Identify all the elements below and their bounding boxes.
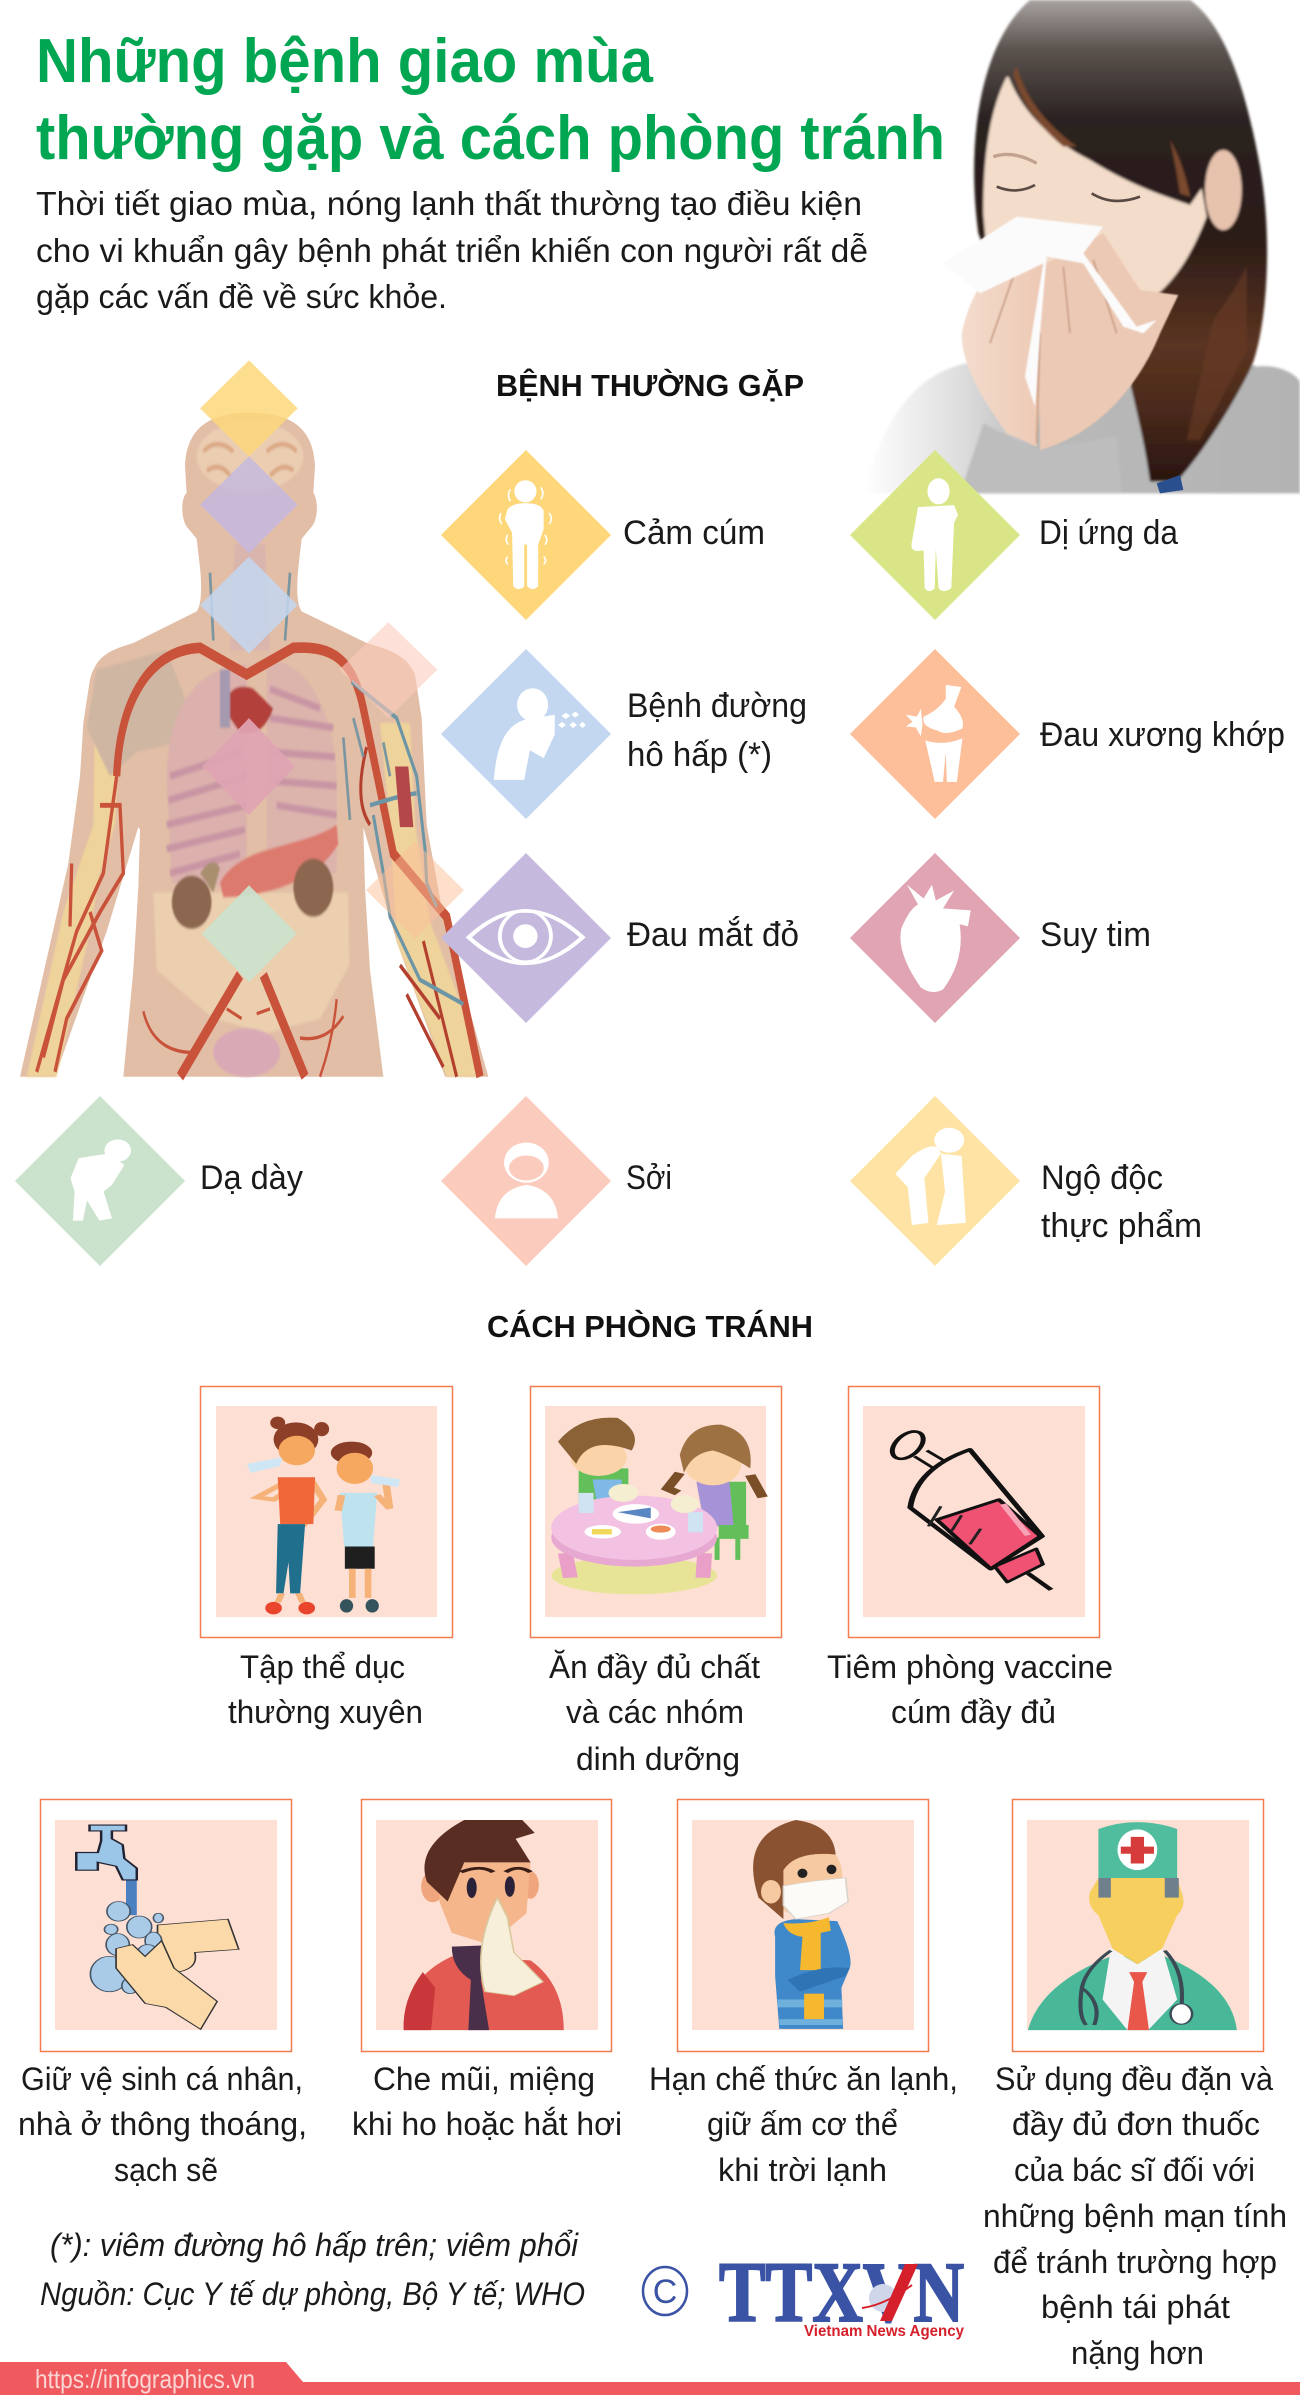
illness: measles: Sởi <box>626 1159 672 1197</box>
title <box>36 27 945 173</box>
tip card: follow doctor's prescription <box>983 1800 1287 2371</box>
illness: flu: Cảm cúm <box>623 514 765 552</box>
heading: common illnesses: BỆNH THƯỜNG GẶP <box>496 367 804 403</box>
footer bar with url: https://infographics.vn <box>35 2364 255 2394</box>
illness: food poisoning: Ngộ độc <box>1041 1159 1163 1197</box>
tip card: hygiene: nhà ở thông thoáng, <box>18 2106 307 2142</box>
illness: food poisoning <box>850 1096 1202 1266</box>
organ marker: purple diamond <box>200 456 298 553</box>
tip card: hygiene: Giữ vệ sinh cá nhân, <box>21 2061 303 2097</box>
tip card: follow doctor's prescription: đầy đủ đơn thuốc <box>1012 2106 1260 2142</box>
organ marker: peach diamond lower <box>366 842 464 939</box>
tip card: follow doctor's prescription: những bệnh mạn tính <box>983 2198 1287 2234</box>
title: thường gặp và cách phòng tránh <box>36 104 945 173</box>
tip card: exercise <box>200 1386 452 1730</box>
tip card: keep warm <box>649 1800 958 2188</box>
photo: woman sneezing into a tissue <box>863 0 1300 493</box>
illness: skin allergy: Dị ứng da <box>1039 514 1178 552</box>
tip card: flu vaccine: Tiêm phòng vaccine <box>827 1649 1113 1685</box>
footnote and source <box>40 2227 585 2312</box>
illness: heart failure <box>850 853 1151 1023</box>
tip card: keep warm: khi trời lạnh <box>718 2152 887 2188</box>
tip card: hygiene: sạch sẽ <box>114 2152 218 2188</box>
illness: joint pain <box>850 649 1285 819</box>
logo: TTXVN: TTXVN <box>719 2244 964 2340</box>
illness: respiratory disease <box>441 649 807 819</box>
organ marker: pink diamond <box>202 718 295 815</box>
organ marker: peach diamond upper <box>339 622 437 718</box>
intro text: gặp các vấn đề về sức khỏe. <box>36 278 447 315</box>
intro text: cho vi khuẩn gây bệnh phát triển khiến con người rất dễ <box>36 232 868 269</box>
tip card: follow doctor's prescription: bệnh tái phát <box>1041 2289 1230 2325</box>
illness: measles <box>441 1096 672 1266</box>
intro text: Thời tiết giao mùa, nóng lạnh thất thường tạo điều kiện <box>36 185 862 222</box>
organ marker: green diamond <box>202 885 297 982</box>
heading: prevention: CÁCH PHÒNG TRÁNH <box>487 1308 813 1344</box>
illness: stomach: Dạ dày <box>200 1159 303 1197</box>
copyright symbol: C <box>653 2273 677 2311</box>
tip card: keep warm: Hạn chế thức ăn lạnh, <box>649 2061 958 2097</box>
illness: food poisoning: thực phẩm <box>1041 1207 1202 1245</box>
tip card: cover nose and mouth <box>352 1800 622 2142</box>
tip card: flu vaccine: cúm đầy đủ <box>891 1694 1056 1730</box>
illness: respiratory disease: hô hấp (*) <box>627 736 772 774</box>
intro text <box>36 185 868 315</box>
tip card: follow doctor's prescription: nặng hơn <box>1071 2335 1204 2371</box>
tip card: cover nose and mouth: Che mũi, miệng <box>373 2061 595 2097</box>
organ marker: yellow diamond <box>200 360 298 456</box>
tip card: hygiene <box>18 1800 307 2188</box>
illness: red eye: Đau mắt đỏ <box>627 916 799 954</box>
tip card: follow doctor's prescription: Sử dụng đều đặn và <box>995 2061 1273 2097</box>
tip card: balanced diet: Ăn đầy đủ chất <box>549 1649 760 1685</box>
illness: flu <box>441 450 765 620</box>
anatomy figure <box>20 360 488 1077</box>
copyright symbol <box>643 2267 687 2315</box>
illness: red eye <box>441 853 799 1023</box>
illness: respiratory disease: Bệnh đường <box>627 687 807 725</box>
tip card: cover nose and mouth: khi ho hoặc hắt hơi <box>352 2106 622 2142</box>
tip card: follow doctor's prescription: của bác sĩ đối với <box>1014 2152 1255 2188</box>
tip card: flu vaccine <box>827 1386 1113 1730</box>
footnote and source: (*): viêm đường hô hấp trên; viêm phổi <box>50 2227 579 2263</box>
footer bar with url <box>0 2362 1300 2395</box>
tip card: exercise: Tập thể dục <box>240 1649 405 1685</box>
logo: TTXVN: Vietnam News Agency <box>804 2323 964 2340</box>
illness: heart failure: Suy tim <box>1040 916 1151 954</box>
tip card: balanced diet: dinh dưỡng <box>576 1741 740 1777</box>
organ marker: blue diamond <box>200 557 298 654</box>
tip card: follow doctor's prescription: để tránh trường hợp <box>993 2244 1277 2280</box>
tip card: exercise: thường xuyên <box>228 1694 423 1730</box>
title: Những bệnh giao mùa <box>36 27 653 96</box>
illness: skin allergy <box>850 450 1178 620</box>
illness: stomach <box>15 1096 303 1266</box>
illness: joint pain: Đau xương khớp <box>1040 716 1285 754</box>
tip card: balanced diet: và các nhóm <box>566 1694 744 1730</box>
tip card: balanced diet <box>530 1386 782 1777</box>
footnote and source: Nguồn: Cục Y tế dự phòng, Bộ Y tế; WHO <box>40 2276 585 2312</box>
tip card: keep warm: giữ ấm cơ thể <box>707 2106 898 2142</box>
